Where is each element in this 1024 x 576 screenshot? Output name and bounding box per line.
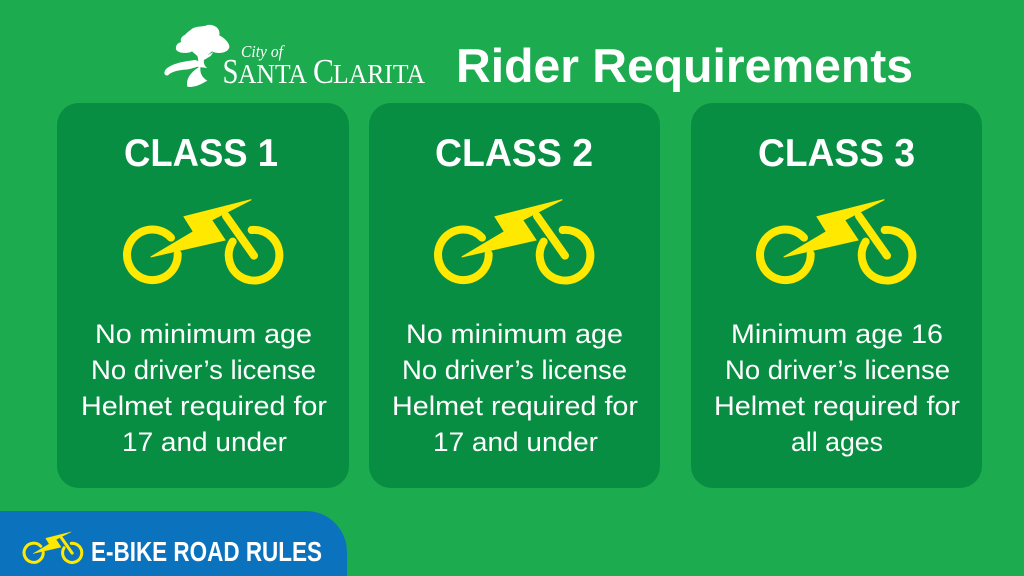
- text: class 3 requirements: No driver’s license: [725, 355, 950, 385]
- logo: City of Santa Clarita: [164, 25, 425, 91]
- heading: class 1: CLASS 1: [124, 132, 278, 175]
- text: class 1 requirements: 17 and under: [122, 427, 287, 457]
- text: class 2 requirements: No minimum age: [406, 319, 623, 349]
- heading: class 2: CLASS 2: [435, 132, 593, 175]
- text: banner label: E-BIKE ROAD RULES: [91, 536, 322, 567]
- text: Santa Clarita: LARITA: [333, 59, 425, 89]
- text: class 2 requirements: Helmet required for: [392, 391, 638, 421]
- text: Santa Clarita: ANTA: [238, 59, 307, 89]
- text: class 2 requirements: [392, 319, 638, 457]
- text: City of: City of: [241, 42, 285, 61]
- icon: small e-bike: [24, 532, 82, 563]
- text: class 1 requirements: No minimum age: [95, 319, 312, 349]
- text: class 1 requirements: [81, 319, 327, 457]
- text: class 2 requirements: 17 and under: [433, 427, 598, 457]
- text: class 1 requirements: No driver’s license: [91, 355, 316, 385]
- heading: class 3: CLASS 3: [758, 132, 915, 175]
- text: class 3 requirements: Minimum age 16: [731, 319, 943, 349]
- text: class 1 requirements: Helmet required for: [81, 391, 327, 421]
- icon: e-bike: [127, 200, 279, 281]
- text: class 3 requirements: Helmet required for: [714, 391, 960, 421]
- text: class 3 requirements: [714, 319, 960, 457]
- text: class 2 requirements: No driver’s license: [402, 355, 627, 385]
- banner: e-bike road rules: [0, 511, 347, 576]
- icon: e-bike: [760, 200, 912, 281]
- panel: class 1: [57, 103, 349, 488]
- icon: e-bike: [438, 200, 590, 281]
- text: Santa Clarita: C: [313, 52, 334, 91]
- panel: class 2: [369, 103, 660, 488]
- text: Santa Clarita: [222, 52, 425, 91]
- panel: class 3: [691, 103, 982, 488]
- text: class 3 requirements: all ages: [791, 427, 883, 457]
- text: Santa Clarita: S: [222, 52, 238, 91]
- icon: tree and road: [164, 25, 229, 87]
- title: Rider Requirements: [456, 39, 913, 92]
